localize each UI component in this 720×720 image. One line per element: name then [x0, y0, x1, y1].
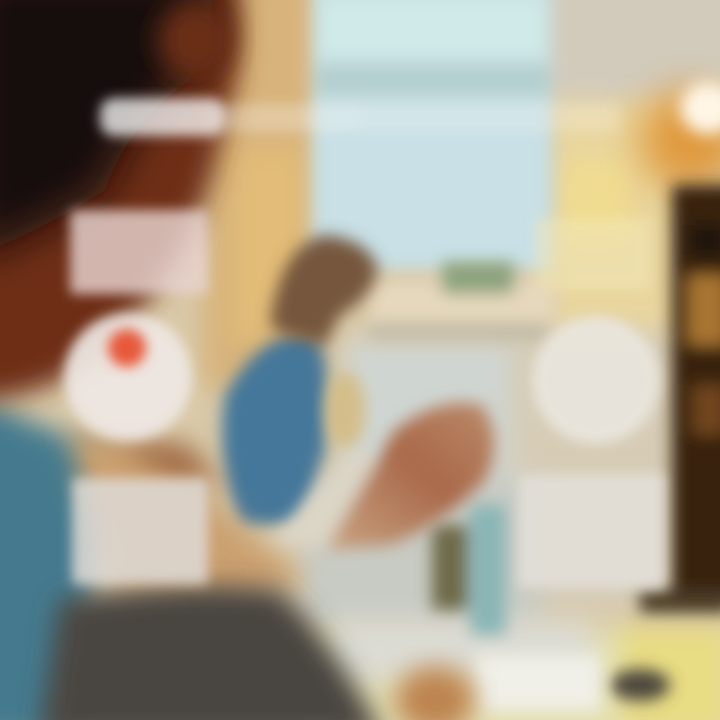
table [300, 620, 720, 720]
panel: left circle gauge [64, 313, 192, 441]
foreground dark shirt [40, 587, 385, 720]
panel: lower right card [518, 474, 664, 588]
panel: upper right card [535, 218, 650, 290]
lamp glow [640, 82, 720, 190]
hand at bottom [395, 666, 475, 720]
foreground person's shoulder [0, 395, 115, 720]
foreground person's arm [70, 430, 305, 605]
foreground person's head [0, 0, 241, 400]
window sill and plant [370, 262, 555, 340]
panel: right circle gauge [532, 316, 660, 444]
panel: lower left card [72, 478, 208, 584]
bookshelf [640, 185, 720, 615]
hand holding book [265, 403, 494, 550]
bottles [432, 505, 506, 635]
window [312, 0, 552, 270]
icon: red dot [108, 329, 146, 367]
panel: upper left card [70, 210, 208, 294]
paper and dark object on table [475, 655, 670, 710]
title bar [100, 98, 620, 136]
woman in blue shirt [222, 235, 378, 525]
